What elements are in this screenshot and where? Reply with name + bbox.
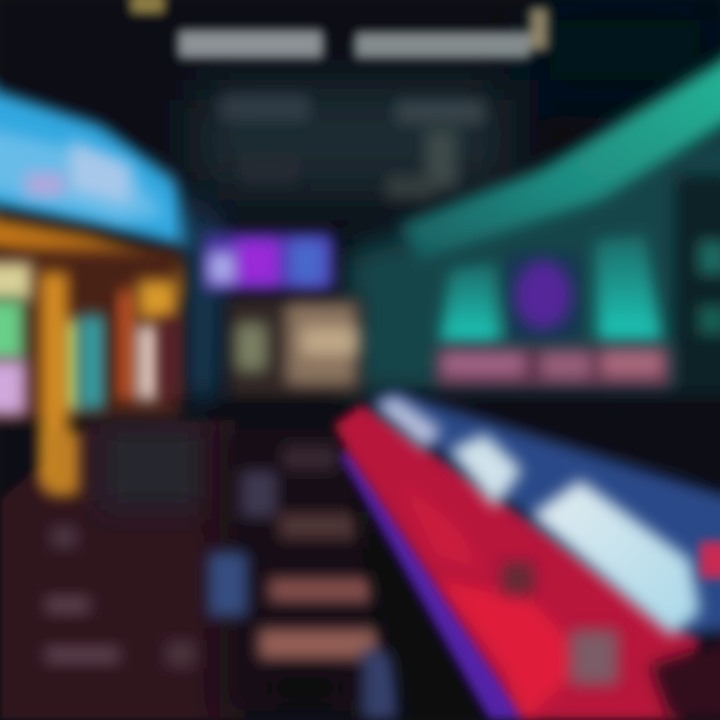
ceiling fixtures bbox=[220, 95, 485, 199]
dark lane beside counter bbox=[350, 480, 485, 720]
left bright blue sign bbox=[0, 82, 225, 400]
dark divider under marquee bbox=[370, 395, 720, 485]
teal right wall bbox=[345, 50, 720, 400]
maroon floor left bbox=[0, 420, 245, 720]
red counter bbox=[335, 405, 720, 720]
ceiling haze bbox=[190, 0, 720, 200]
purple edge strip bbox=[340, 450, 525, 720]
purple arch bbox=[515, 261, 571, 329]
teal alcove screens bbox=[440, 235, 662, 342]
center gold machines bbox=[228, 298, 363, 398]
white illuminated table panels bbox=[370, 392, 720, 636]
center aisle chairs bbox=[208, 420, 398, 720]
left orange arcade machines bbox=[0, 213, 180, 420]
title: blurred heading bbox=[130, 0, 548, 58]
pink marquee band bbox=[436, 347, 671, 389]
orange pole bbox=[40, 272, 79, 495]
center purple neon sign bbox=[205, 234, 333, 290]
